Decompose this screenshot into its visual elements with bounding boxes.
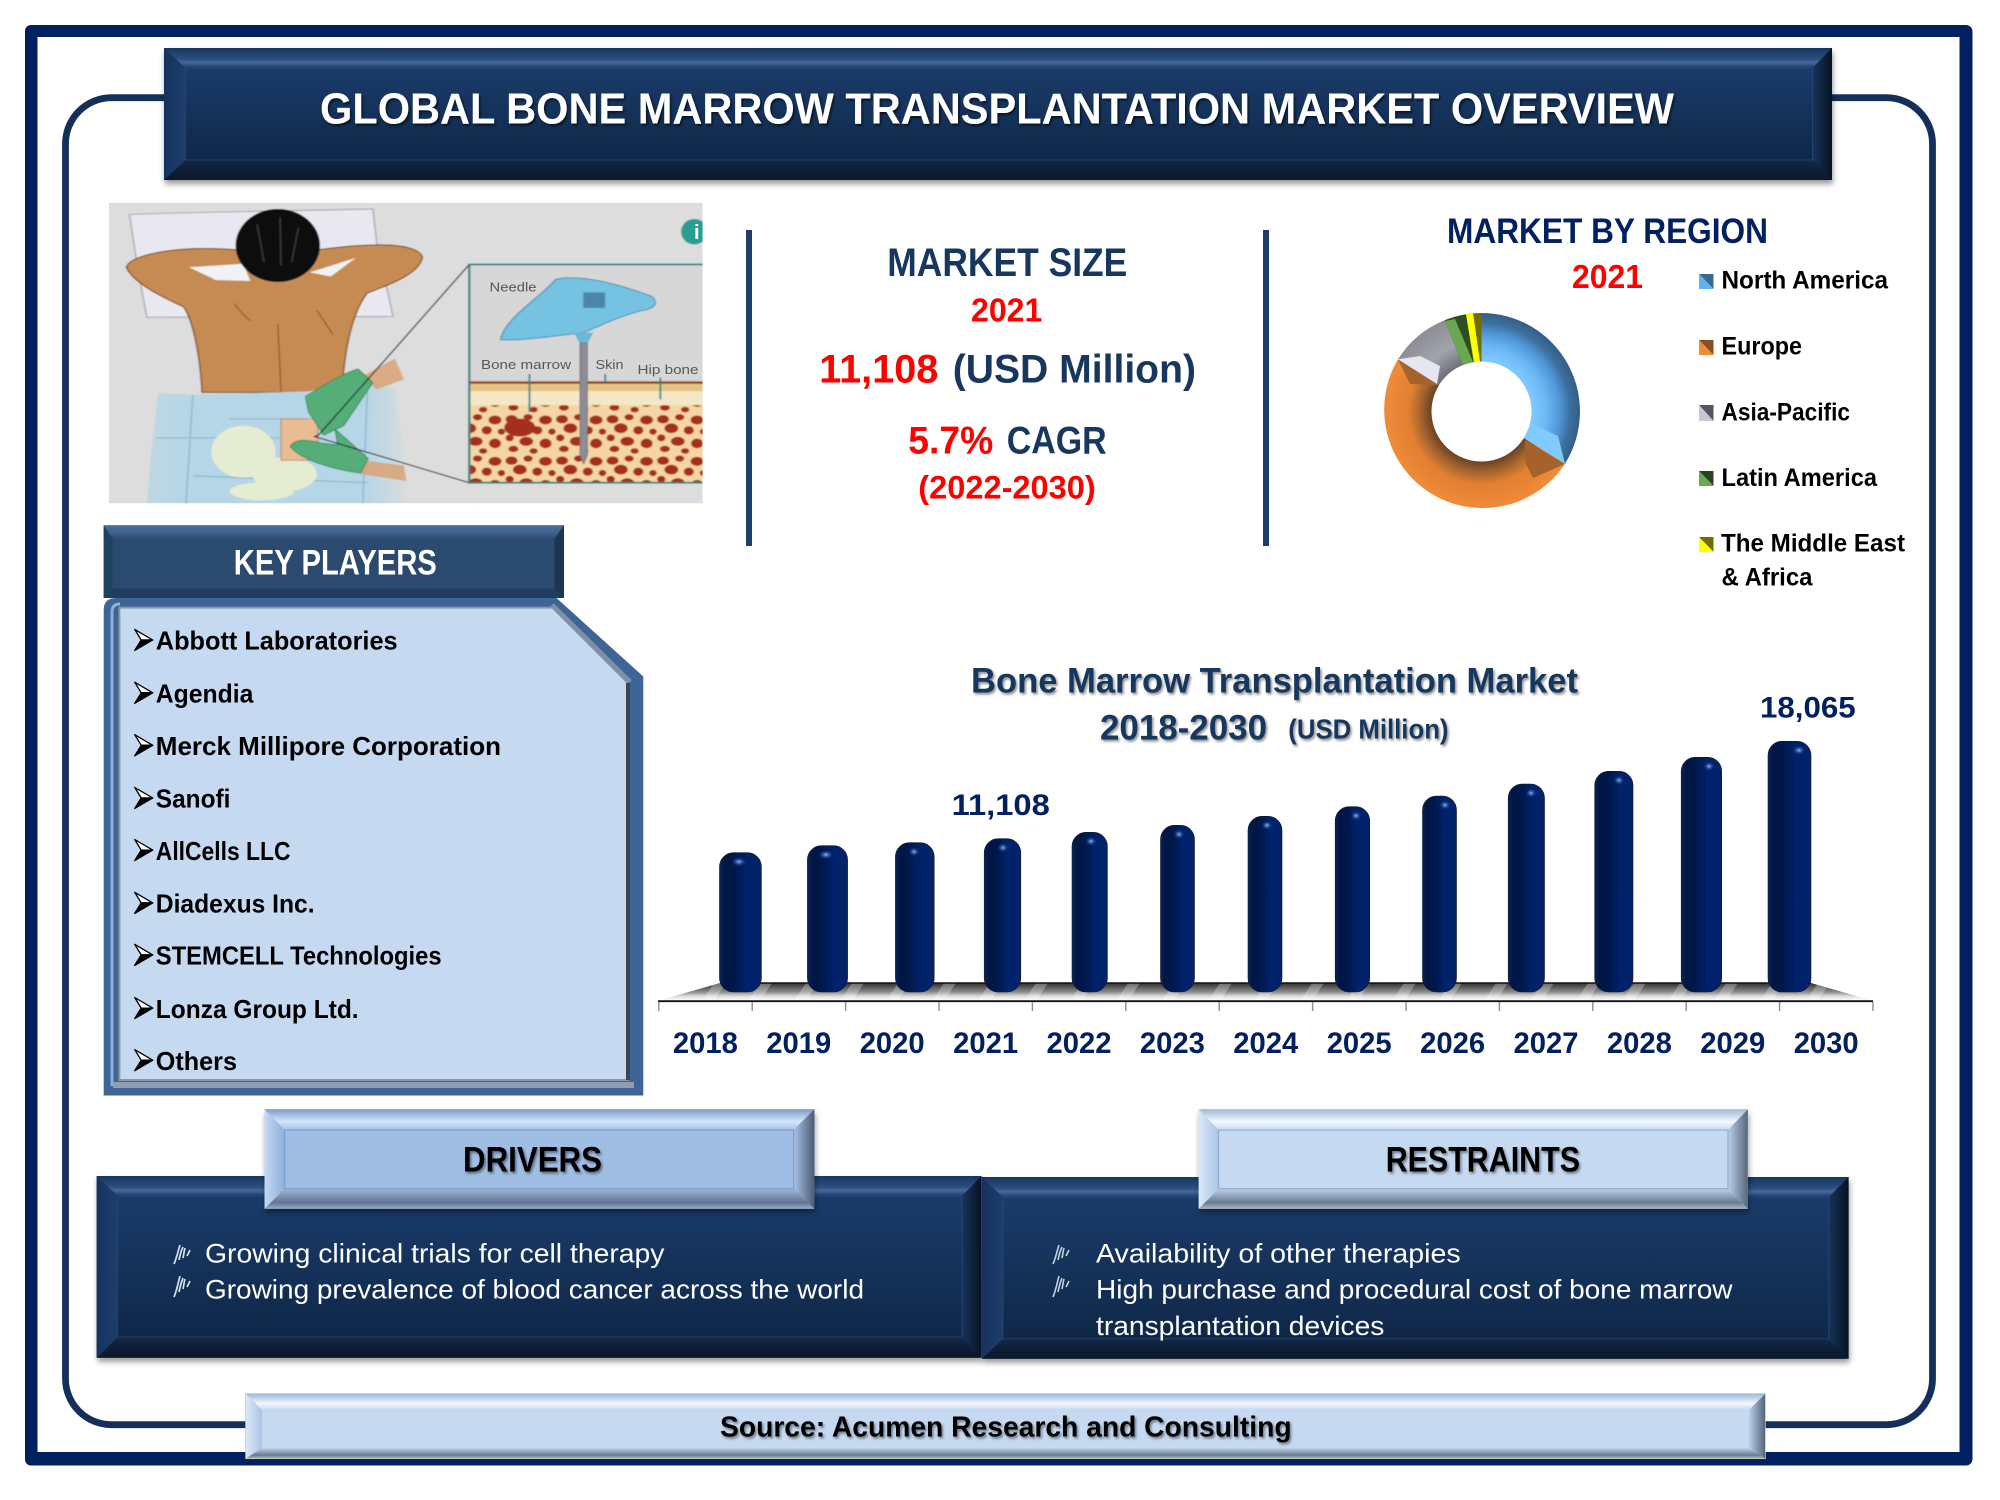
illustration: bone marrow biopsy: Hip bone xyxy=(638,362,698,377)
bars xyxy=(720,741,1811,992)
company list: Others xyxy=(156,1046,237,1076)
drivers list: Growing clinical trials for cell therapy xyxy=(205,1239,665,1269)
chart title: (USD Million) xyxy=(1288,714,1448,744)
company list: Diadexus Inc. xyxy=(156,889,315,919)
key players header: KEY PLAYERS xyxy=(234,543,437,582)
year labels: 2022 xyxy=(1046,1027,1112,1060)
company list: STEMCELL Technologies xyxy=(156,941,442,971)
restraints list: High purchase and procedural cost of bone marrow xyxy=(1096,1275,1733,1305)
illustration: bone marrow biopsy: Bone marrow xyxy=(481,357,572,372)
year labels: 2024 xyxy=(1233,1027,1299,1060)
year labels: 2029 xyxy=(1700,1027,1765,1060)
divider left xyxy=(746,230,752,546)
panel: restraints xyxy=(982,1177,1849,1359)
market size block: 11,108 xyxy=(819,348,938,392)
market size block: (2022-2030) xyxy=(918,469,1096,505)
illustration: bone marrow biopsy xyxy=(109,203,708,503)
year labels: 2020 xyxy=(860,1027,925,1060)
title banner xyxy=(164,48,1832,180)
legend: Latin America xyxy=(1722,465,1877,492)
legend: Asia-Pacific xyxy=(1722,400,1850,427)
legend xyxy=(1699,268,1905,592)
drivers header xyxy=(264,1109,814,1209)
drivers list: Growing prevalence of blood cancer across the world xyxy=(205,1275,864,1305)
market size block: 5.7% xyxy=(908,419,993,462)
drivers header: DRIVERS xyxy=(463,1141,602,1180)
year labels: 2026 xyxy=(1420,1027,1485,1060)
illustration: bone marrow biopsy: i xyxy=(694,222,700,244)
bar highlights xyxy=(731,745,1806,867)
company list: Agendia xyxy=(156,678,254,708)
market size block: CAGR xyxy=(1007,419,1107,462)
year labels: 2018 xyxy=(673,1027,738,1060)
company list: Lonza Group Ltd. xyxy=(156,994,359,1024)
source bar: Source: Acumen Research and Consulting xyxy=(720,1412,1292,1444)
company list xyxy=(135,626,501,1076)
company list: Sanofi xyxy=(156,784,230,814)
region year: 2021 xyxy=(1572,258,1643,295)
illustration: bone marrow biopsy: Skin xyxy=(596,357,624,372)
value label 2030: 18,065 xyxy=(1760,691,1856,724)
legend: & Africa xyxy=(1722,565,1813,592)
key players panel xyxy=(104,525,643,1096)
restraints list xyxy=(1053,1239,1733,1341)
market size block: (USD Million) xyxy=(953,348,1196,392)
market size block: MARKET SIZE xyxy=(887,241,1127,285)
chart floor and axis xyxy=(658,983,1873,1011)
divider right xyxy=(1263,230,1269,546)
legend: North America xyxy=(1722,268,1888,295)
year labels: 2030 xyxy=(1794,1027,1859,1060)
market size block xyxy=(819,241,1196,505)
value label 2021: 11,108 xyxy=(952,789,1050,822)
year labels: 2023 xyxy=(1140,1027,1205,1060)
chart title: Bone Marrow Transplantation Market xyxy=(971,661,1578,700)
restraints list: transplantation devices xyxy=(1096,1311,1384,1341)
year labels xyxy=(673,1027,1859,1060)
restraints list: Availability of other therapies xyxy=(1096,1239,1461,1269)
drivers list xyxy=(174,1239,864,1305)
year labels: 2025 xyxy=(1327,1027,1392,1060)
region heading: MARKET BY REGION xyxy=(1447,212,1768,251)
year labels: 2021 xyxy=(953,1027,1018,1060)
restraints header: RESTRAINTS xyxy=(1386,1141,1580,1180)
chart title xyxy=(971,661,1578,747)
chart title: 2018-2030 xyxy=(1100,708,1267,747)
panel: drivers xyxy=(97,1176,982,1358)
year labels: 2027 xyxy=(1514,1027,1578,1060)
market by region block xyxy=(1384,212,1905,592)
illustration labels: Needle xyxy=(490,280,536,294)
donut chart xyxy=(1384,313,1580,508)
market size block: 2021 xyxy=(971,292,1042,329)
legend: Europe xyxy=(1722,334,1802,361)
key players body xyxy=(104,598,643,1096)
year labels: 2019 xyxy=(766,1027,831,1060)
bone marrow market chart xyxy=(658,661,1873,1060)
company list: Abbott Laboratories xyxy=(156,626,398,656)
legend: The Middle East xyxy=(1721,531,1905,558)
title text: GLOBAL BONE MARROW TRANSPLANTATION MARKET OVERVIEW xyxy=(320,85,1675,133)
key players header xyxy=(104,525,564,598)
source bar xyxy=(246,1394,1765,1458)
restraints header xyxy=(1199,1109,1748,1209)
year labels: 2028 xyxy=(1607,1027,1672,1060)
company list: AllCells LLC xyxy=(156,836,291,866)
company list: Merck Millipore Corporation xyxy=(156,731,501,761)
